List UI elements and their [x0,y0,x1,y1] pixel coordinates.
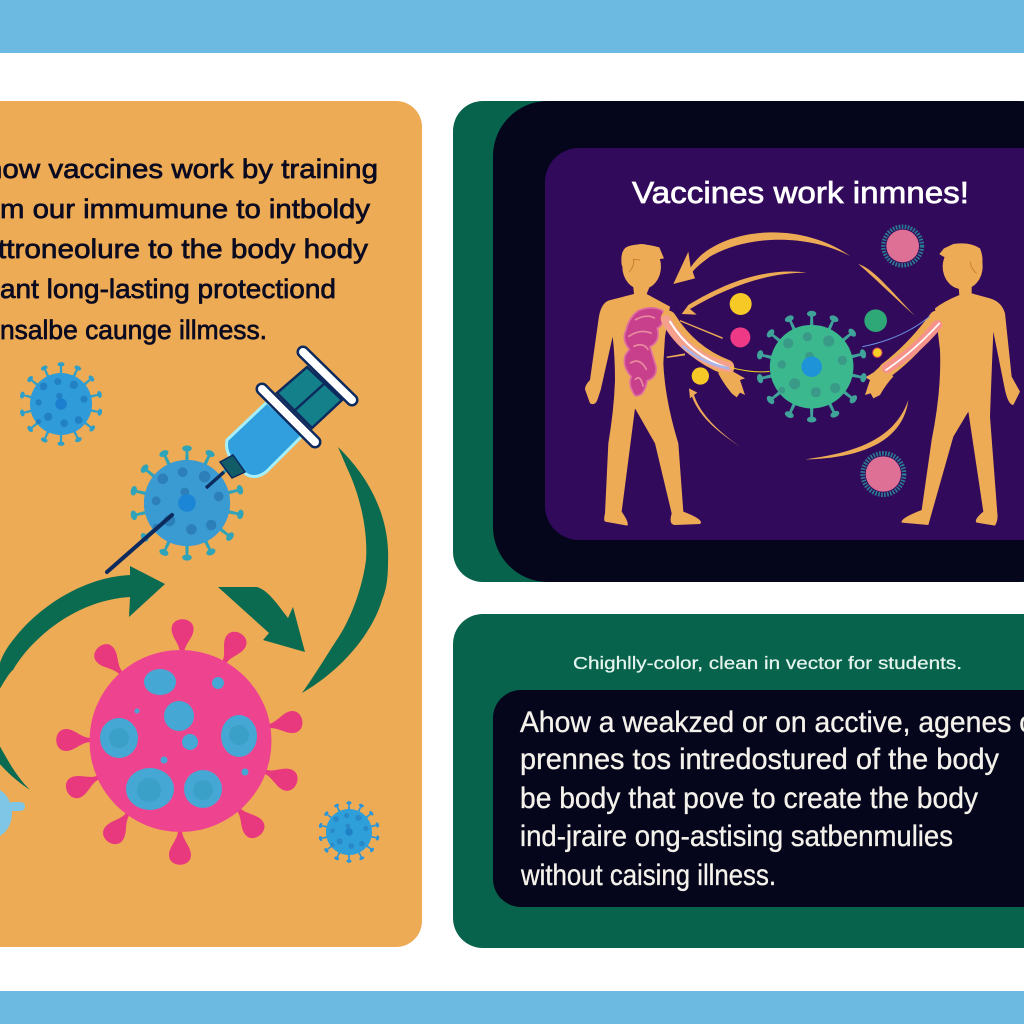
icon: small blue virus bottom [318,801,380,863]
text block: weakened agent explanation: be body that pove to create the body [520,782,978,815]
panel: explanation (green) [453,614,1024,948]
panel: diagram frame (green) [453,101,1024,582]
text block: weakened agent explanation: prennes tos intredostured of the body [520,743,999,776]
text block: how vaccines work: ttroneolure to the body hody [0,234,369,264]
panel: explanation dark box [493,690,1024,907]
heading: vaccines work: Vaccines work inmnes! [632,176,969,210]
text block: weakened agent explanation: ind-jraire ong-astising satbenmulies [520,820,953,853]
arrows: orange curved [667,232,915,459]
diagram: immune response [585,227,1020,526]
organs: left body [624,308,664,396]
icon: blue virus with needle [130,445,244,561]
icon: pink virus bottom [863,453,904,495]
figure: left person [585,244,745,526]
icon: pink virus top [883,227,922,265]
arrow: middle green [218,587,305,652]
figure: right person [865,243,1020,526]
icon: central green virus [756,311,867,423]
text block: weakened agent explanation: without caising illness. [520,859,776,892]
dots: antigens [692,293,887,385]
text block: how vaccines work: m our immumune to intboldy [0,194,371,224]
text block: weakened agent explanation [520,706,1024,892]
arrow: large right curved green [302,447,388,693]
arm veins [666,317,939,372]
bottom band [0,991,1024,1024]
icon: large pink virus [56,619,304,865]
icon: syringe [107,352,352,572]
text block: how vaccines work: ant long-lasting protectiond [0,274,336,304]
panel: diagram purple [545,148,1024,540]
icon: small blue virus top [19,362,103,446]
subtitle: Chighlly-color, clean in vector for students. [573,653,962,673]
text block: how vaccines work: nsalbe caunge illmess. [0,315,267,345]
panel: vaccine explanation (orange) [0,101,422,947]
top band [0,0,1024,53]
text block: how vaccines work [0,154,378,345]
arrow: left curved green [0,566,165,790]
panel: diagram inner dark [493,101,1024,582]
icon: partial blue cell at edge [0,788,25,838]
